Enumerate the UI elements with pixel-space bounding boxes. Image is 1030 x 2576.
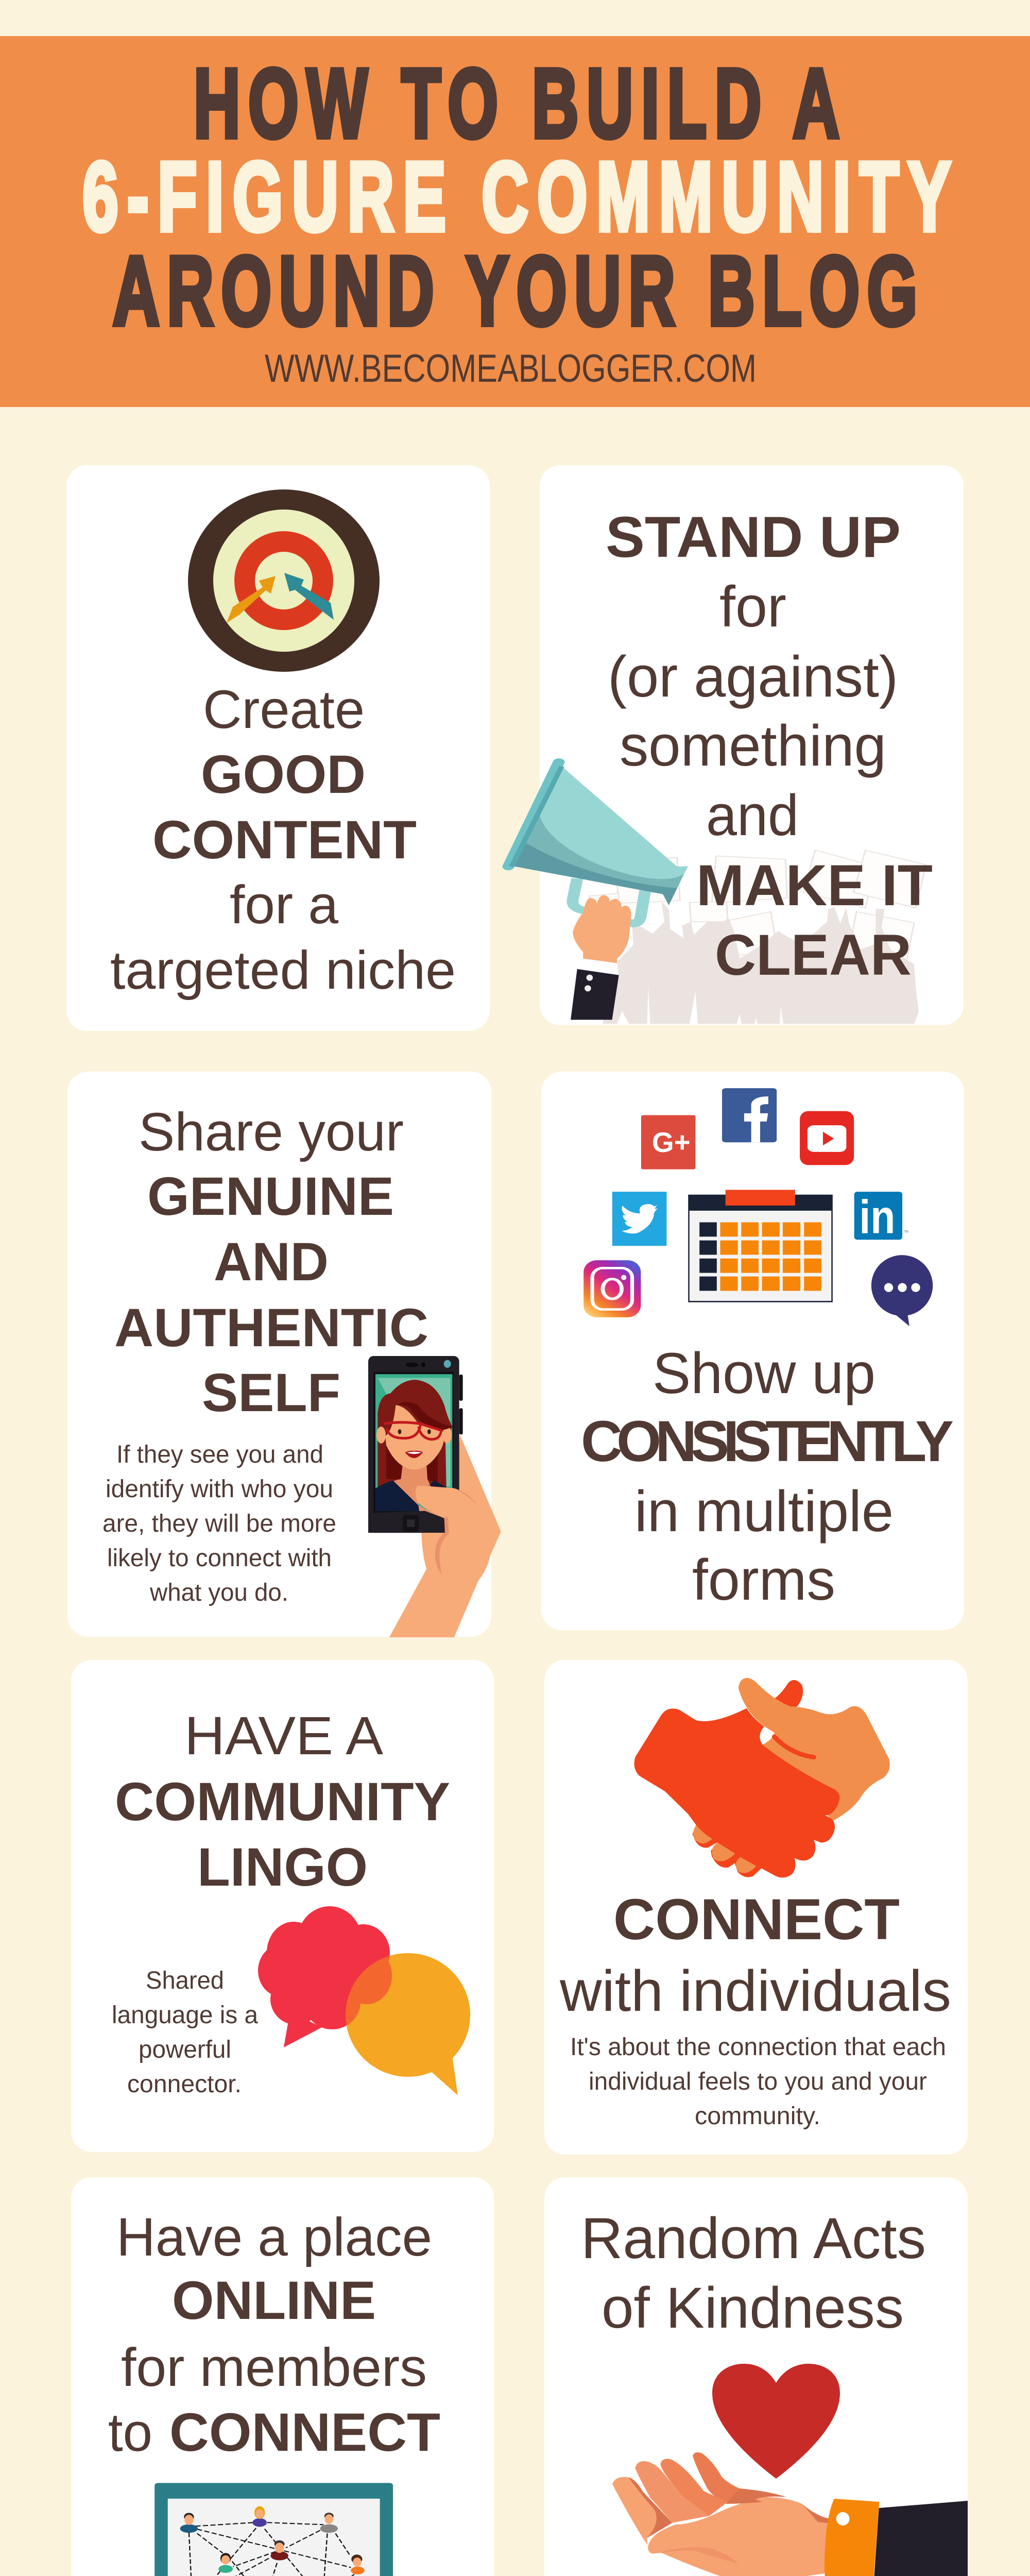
panel: stand up	[508, 465, 964, 1025]
title: 6-FIGURE COMMUNITY	[82, 142, 951, 251]
text: identify with you: what you do.	[149, 1579, 288, 1606]
website url: WWW.BECOMEABLOGGER.COM	[265, 347, 757, 391]
panel: good content	[66, 465, 490, 1031]
text: create good content: GOOD	[201, 744, 366, 805]
icon: speech bubbles	[258, 1906, 470, 2095]
text: share your genuine self: AUTHENTIC	[114, 1298, 428, 1358]
icon: linkedin: TM	[904, 1230, 908, 1233]
icon: instagram	[583, 1260, 641, 1317]
network lines	[189, 2522, 354, 2576]
text: identify with you	[102, 1441, 336, 1606]
panel: random acts of kindness	[544, 2177, 968, 2576]
icon: handshake	[634, 1678, 890, 1877]
text: identify with you: likely to connect with	[107, 1545, 332, 1572]
text: create good content: targeted niche	[110, 940, 456, 1001]
text: shared language: language is a	[112, 2002, 258, 2029]
text: have a place online	[108, 2207, 440, 2463]
text: stand up and make it clear: and	[706, 783, 799, 848]
text: show up consistently	[581, 1341, 954, 1612]
text: create good content	[110, 680, 456, 1001]
text: have a community lingo: HAVE A	[184, 1706, 383, 1766]
text: stand up and make it clear: MAKE IT	[696, 853, 933, 918]
text: random acts of kindness	[581, 2206, 926, 2340]
text: identify with you: identify with who you	[106, 1476, 333, 1503]
text: have a place online: for members	[121, 2337, 427, 2398]
icon: facebook	[722, 1088, 777, 1142]
text: stand up and make it clear: STAND UP	[606, 505, 901, 569]
icon: hand holding phone with selfie	[368, 1356, 501, 1637]
text: show up consistently: Show up	[653, 1341, 876, 1405]
text: create good content: CONTENT	[152, 810, 417, 870]
text: create good content: for a	[230, 875, 339, 935]
people	[180, 2506, 365, 2576]
panel: online place	[71, 2177, 494, 2576]
text: random acts of kindness: Random Acts	[581, 2206, 926, 2270]
text: show up consistently: forms	[692, 1548, 835, 1612]
panel: show up consistently	[541, 1072, 964, 1630]
icon: open hand	[612, 2452, 968, 2576]
text: create good content: Create	[203, 680, 365, 740]
text: share your genuine self	[114, 1102, 428, 1423]
icon: target with arrows	[188, 489, 380, 672]
title	[82, 49, 951, 346]
title: HOW TO BUILD A	[194, 49, 839, 158]
text: stand up and make it clear: something	[620, 714, 886, 778]
text: shared language	[112, 1967, 258, 2098]
text: connection description: It's about the connection that each	[570, 2033, 946, 2061]
text: share your genuine self: SELF	[202, 1363, 340, 1423]
text: have a place online: ONLINE	[172, 2270, 376, 2331]
icon: twitter	[612, 1192, 666, 1246]
icon: heart	[712, 2364, 840, 2479]
text: show up consistently: in multiple	[634, 1479, 894, 1544]
text: shared language: Shared	[146, 1967, 224, 1994]
text: stand up and make it clear: (or against)	[608, 645, 898, 709]
text: stand up and make it clear	[606, 505, 933, 987]
icon: crowd and megaphone	[508, 762, 926, 1024]
text: identify with you: are, they will be more	[102, 1510, 336, 1537]
text: have a community lingo	[115, 1706, 450, 1897]
panel: connect with individuals	[544, 1660, 968, 2155]
text: shared language: powerful	[139, 2036, 231, 2063]
icon: social media and calendar	[583, 1088, 933, 1326]
text: have a community lingo: LINGO	[197, 1837, 368, 1897]
icon: linkedin: in	[859, 1191, 895, 1243]
panel: community lingo	[71, 1660, 494, 2152]
text: connect with individuals: CONNECT	[613, 1887, 900, 1952]
header banner	[0, 36, 1030, 407]
text: connection description: community.	[695, 2103, 820, 2130]
text: share your genuine self: GENUINE	[147, 1166, 394, 1227]
icon: calendar	[688, 1190, 833, 1302]
text: shared language: connector.	[127, 2071, 242, 2098]
text: connection description: individual feels to you and your	[589, 2068, 927, 2095]
icon: youtube	[800, 1111, 854, 1165]
text: connection description	[570, 2033, 946, 2130]
icon: monitor with network of people	[154, 2483, 393, 2576]
icon: chat bubble	[871, 1255, 933, 1326]
text: share your genuine self: AND	[214, 1232, 329, 1292]
title: AROUND YOUR BLOG	[113, 236, 917, 346]
text: identify with you: If they see you and	[116, 1441, 323, 1468]
text: have a place online: Have a place	[116, 2207, 432, 2267]
icon: google plus: G+	[652, 1126, 691, 1158]
text: stand up and make it clear: for	[719, 574, 786, 639]
text: have a place online: CONNECT	[169, 2402, 440, 2463]
text: random acts of kindness: of Kindness	[602, 2276, 904, 2340]
panel: genuine self	[67, 1072, 501, 1637]
icon: google plus	[641, 1115, 696, 1170]
text: have a community lingo: COMMUNITY	[115, 1772, 450, 1832]
text: show up consistently: CONSISTENTLY	[581, 1409, 954, 1473]
text: share your genuine self: Share your	[139, 1102, 404, 1162]
text: stand up and make it clear: CLEAR	[715, 923, 912, 987]
text: connect with individuals: with individuals	[559, 1959, 951, 2023]
text: have a place online: to	[108, 2402, 152, 2463]
text: connect with individuals	[559, 1887, 951, 2023]
